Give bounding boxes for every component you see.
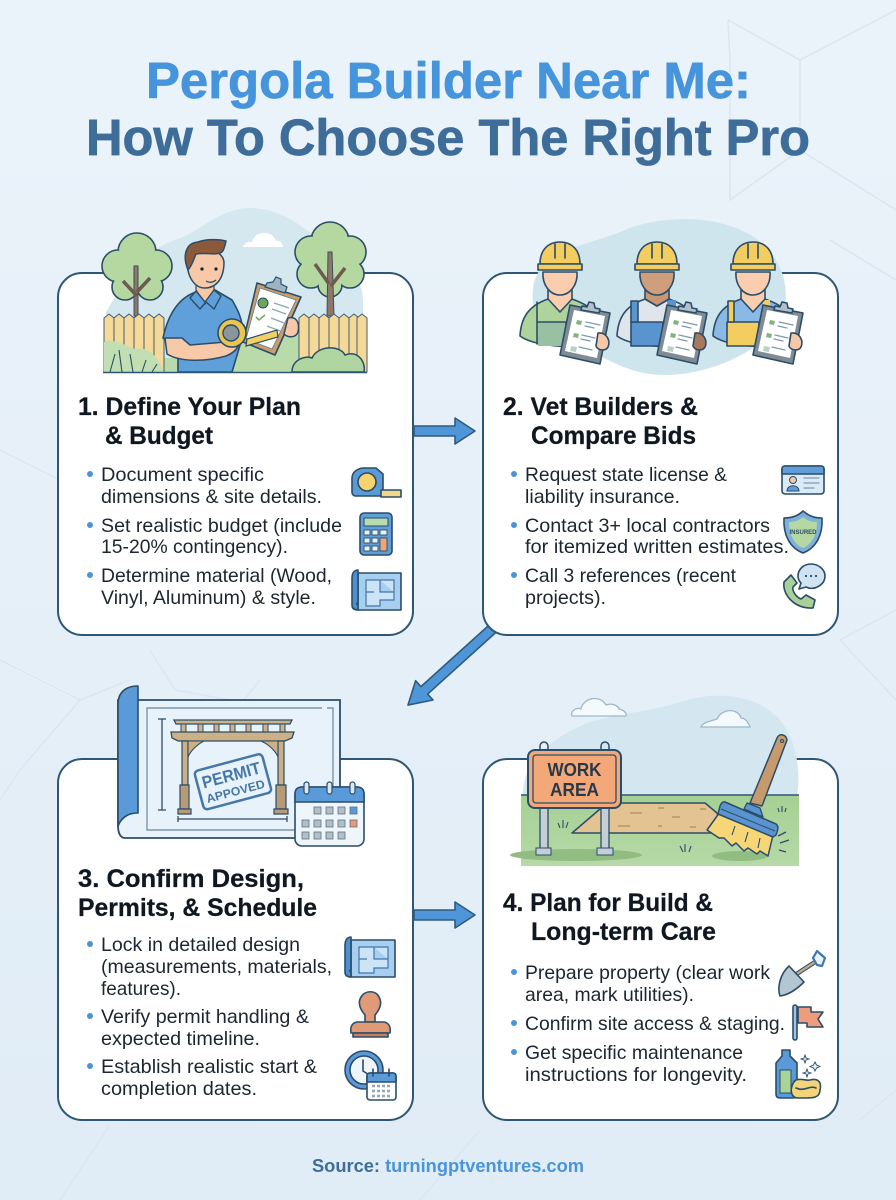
bullet list: completion dates. bbox=[101, 1078, 257, 1100]
bullet list: Prepare property (clear work bbox=[525, 962, 770, 984]
title: Pergola Builder Near Me: bbox=[146, 52, 751, 109]
title bbox=[86, 52, 810, 166]
bushes bbox=[104, 341, 364, 372]
bullet list: Lock in detailed design bbox=[101, 934, 300, 956]
icon: clock and calendar bbox=[345, 1051, 396, 1100]
heading bbox=[78, 393, 301, 450]
pergola bbox=[171, 720, 294, 814]
bullet list bbox=[511, 962, 785, 1086]
heading bbox=[503, 889, 716, 946]
bullet list: for itemized written estimates. bbox=[525, 536, 789, 558]
permit approved stamp bbox=[194, 753, 272, 810]
man bbox=[163, 240, 243, 372]
worker 2 bbox=[617, 242, 707, 364]
icon: phone with speech bubble bbox=[784, 564, 825, 608]
heading: & Budget bbox=[105, 422, 214, 450]
heading bbox=[78, 865, 317, 922]
work area sign: WORK bbox=[548, 760, 602, 780]
panel: step 1 define your plan and budget bbox=[58, 208, 413, 635]
title: How To Choose The Right Pro bbox=[86, 109, 810, 166]
bullet list: Request state license & bbox=[525, 464, 727, 486]
bullet list: projects). bbox=[525, 587, 606, 609]
bullet list: expected timeline. bbox=[101, 1028, 260, 1050]
bullet list: features). bbox=[101, 978, 181, 1000]
heading: Permits, & Schedule bbox=[78, 894, 317, 922]
icon: ID card bbox=[782, 466, 824, 494]
panel: step 3 confirm design, permits and schedule bbox=[58, 686, 413, 1120]
bullet list: (measurements, materials, bbox=[101, 956, 332, 978]
heading: 1. Define Your Plan bbox=[78, 393, 301, 421]
shadows and grass bbox=[510, 806, 786, 861]
bullet list: Get specific maintenance bbox=[525, 1042, 743, 1064]
worker 3 bbox=[713, 242, 803, 364]
icon: shield: INSURED bbox=[789, 530, 817, 536]
illustration: blueprint with pergola, permit stamp and calendar bbox=[118, 686, 364, 846]
bullet list: Vinyl, Aluminum) & style. bbox=[101, 587, 316, 609]
bullet list: Determine material (Wood, bbox=[101, 565, 332, 587]
heading: 2. Vet Builders & bbox=[503, 393, 698, 421]
bullet list: Verify permit handling & bbox=[101, 1006, 309, 1028]
illustration: three workers with clipboards bbox=[520, 219, 803, 375]
clipboard bbox=[243, 277, 301, 355]
bullet list bbox=[87, 464, 342, 609]
fence bbox=[104, 314, 367, 372]
broom bbox=[707, 735, 789, 856]
right tree bbox=[295, 222, 366, 316]
icon: tape measure bbox=[352, 468, 401, 497]
icon: rubber stamp bbox=[351, 992, 390, 1037]
bullet list bbox=[87, 934, 332, 1100]
dirt patch bbox=[572, 803, 722, 833]
bullet list: 15-20% contingency). bbox=[101, 536, 288, 558]
panel: step 4 plan for build and long-term care bbox=[483, 696, 838, 1120]
icon: blueprint bbox=[345, 937, 395, 977]
permit approved stamp: PERMIT bbox=[200, 758, 263, 792]
bullet list: instructions for longevity. bbox=[525, 1064, 747, 1086]
bullet list: Establish realistic start & bbox=[101, 1056, 317, 1078]
blueprint sheet bbox=[118, 686, 340, 838]
tape measure bbox=[218, 319, 278, 347]
heading bbox=[503, 393, 698, 450]
icon: shovel bbox=[779, 951, 825, 996]
left tree bbox=[102, 233, 172, 316]
worker 1 bbox=[520, 242, 610, 364]
heading: Compare Bids bbox=[531, 422, 696, 450]
permit approved stamp: APPOVED bbox=[205, 777, 267, 806]
icon: flag bbox=[793, 1005, 823, 1040]
source line: Source: turningptventures.com bbox=[312, 1156, 584, 1176]
bullet list: Set realistic budget (include bbox=[101, 515, 342, 537]
icon: shield bbox=[784, 511, 822, 553]
work area sign: AREA bbox=[550, 780, 599, 800]
ground bbox=[521, 795, 799, 866]
arrow: step 2 to step 3 bbox=[399, 614, 507, 715]
clouds bbox=[572, 698, 750, 727]
arrow: step 3 to step 4 bbox=[414, 902, 475, 928]
arrow: step 1 to step 2 bbox=[414, 418, 475, 444]
bullet list: area, mark utilities). bbox=[525, 984, 694, 1006]
icon: bottle and sponge bbox=[776, 1050, 821, 1098]
work area sign bbox=[528, 742, 621, 855]
illustration: work area sign, dirt patch and broom bbox=[510, 696, 799, 866]
bullet list bbox=[511, 464, 789, 609]
icon: blueprint bbox=[352, 570, 401, 610]
bullet list: Call 3 references (recent bbox=[525, 565, 737, 587]
illustration: man with tape measure and clipboard in a garden bbox=[102, 208, 367, 373]
calendar bbox=[295, 782, 364, 846]
heading: 3. Confirm Design, bbox=[78, 865, 304, 893]
bullet list: liability insurance. bbox=[525, 486, 680, 508]
heading: Long-term Care bbox=[531, 918, 716, 946]
heading: 4. Plan for Build & bbox=[503, 889, 713, 917]
bullet list: dimensions & site details. bbox=[101, 486, 322, 508]
bullet list: Document specific bbox=[101, 464, 264, 486]
bullet list: Confirm site access & staging. bbox=[525, 1013, 785, 1035]
panel: step 2 vet builders and compare bids bbox=[483, 219, 838, 635]
bullet list: Contact 3+ local contractors bbox=[525, 515, 770, 537]
icon: calculator bbox=[360, 513, 392, 555]
